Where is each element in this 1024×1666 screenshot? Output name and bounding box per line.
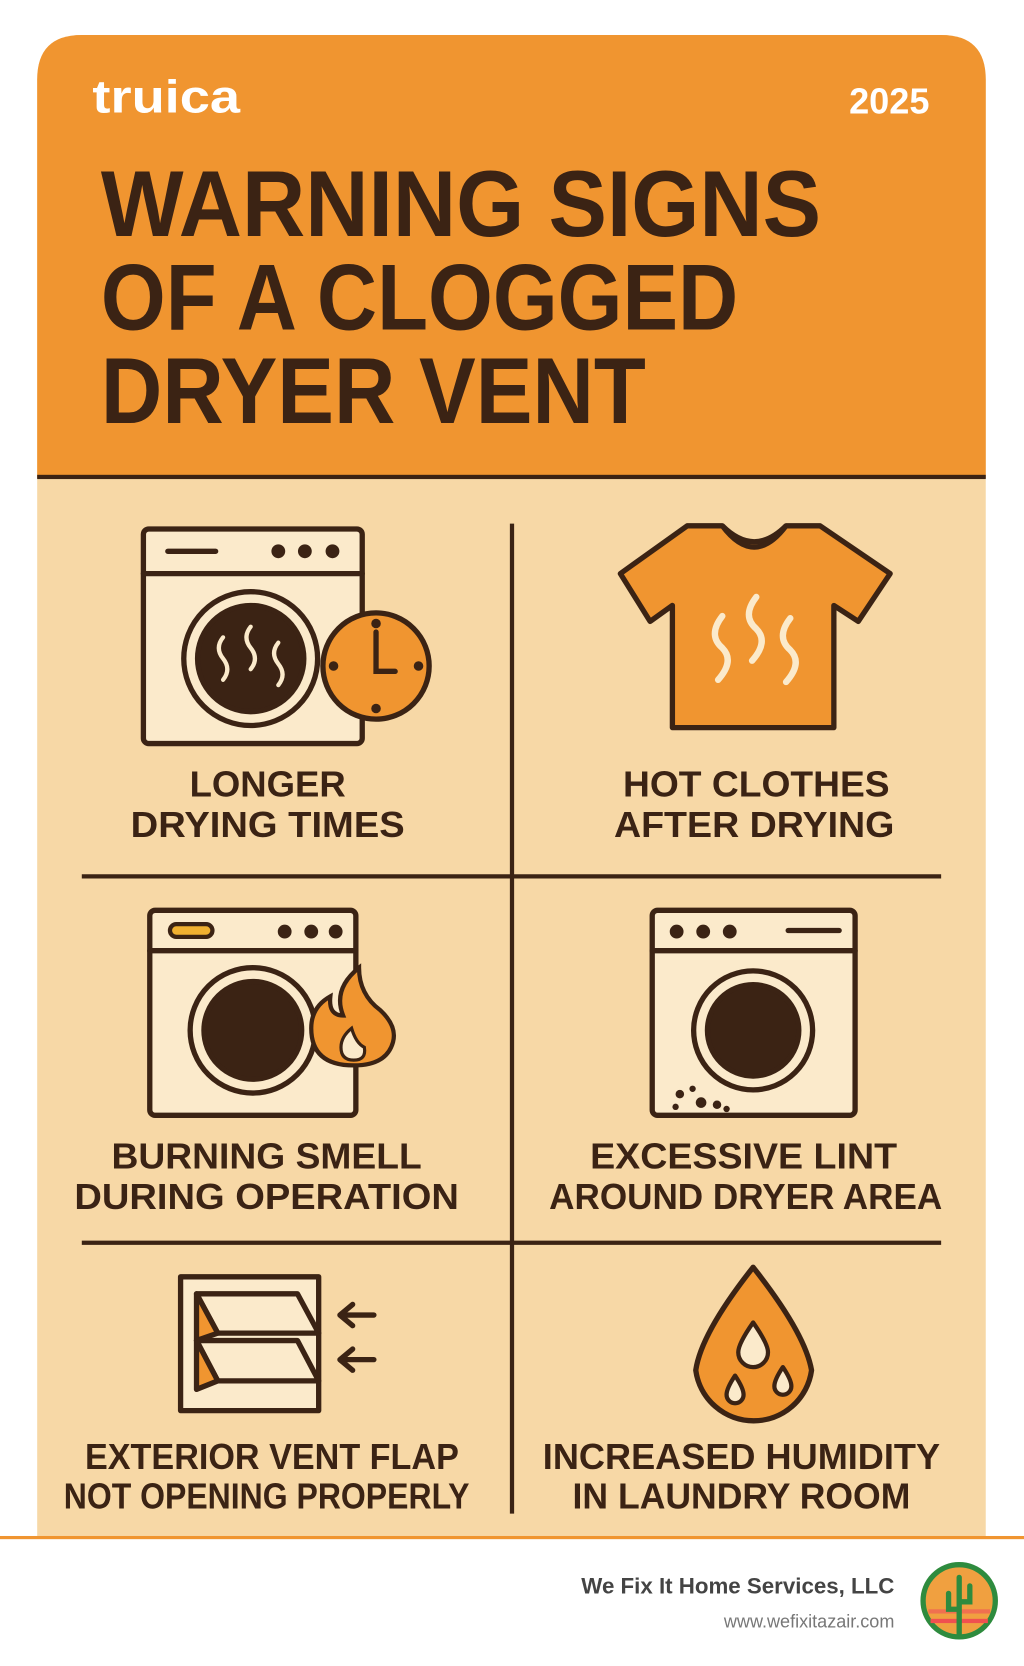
label: exterior vent flap: NOT OPENING PROPERLY bbox=[64, 1475, 470, 1516]
label: longer drying times bbox=[131, 764, 405, 845]
icon: vent flap with arrows bbox=[181, 1277, 374, 1411]
icon: dryer with flame bbox=[150, 910, 394, 1115]
logo: truica: truica bbox=[92, 71, 241, 123]
label: increased humidity: INCREASED HUMIDITY bbox=[543, 1436, 940, 1477]
label: exterior vent flap: EXTERIOR VENT FLAP bbox=[85, 1436, 459, 1477]
label: hot clothes bbox=[614, 764, 894, 845]
label: exterior vent flap bbox=[64, 1436, 470, 1516]
title: OF A CLOGGED bbox=[101, 244, 738, 349]
footer company text bbox=[581, 1573, 894, 1631]
label: longer drying times: DRYING TIMES bbox=[131, 804, 405, 845]
label: excessive lint: EXCESSIVE LINT bbox=[590, 1135, 897, 1176]
label: burning smell: DURING OPERATION bbox=[74, 1176, 459, 1217]
label: hot clothes: AFTER DRYING bbox=[614, 804, 894, 845]
year: 2025 bbox=[849, 81, 929, 122]
icon: dryer with clock bbox=[143, 529, 429, 744]
title: DRYER VENT bbox=[101, 338, 646, 443]
title: WARNING SIGNS bbox=[101, 151, 821, 256]
footer company text: We Fix It Home Services, LLC bbox=[581, 1573, 894, 1598]
header panel bbox=[37, 35, 986, 478]
label: hot clothes: HOT CLOTHES bbox=[623, 764, 890, 805]
label: increased humidity: IN LAUNDRY ROOM bbox=[573, 1475, 910, 1516]
label: excessive lint: AROUND DRYER AREA bbox=[549, 1176, 942, 1217]
label: excessive lint bbox=[549, 1135, 942, 1217]
footer company text: www.wefixitazair.com bbox=[723, 1611, 894, 1631]
icon: dryer with lint bbox=[652, 910, 855, 1115]
footer logo: cactus bbox=[923, 1565, 995, 1637]
label: burning smell: BURNING SMELL bbox=[112, 1135, 422, 1176]
label: increased humidity bbox=[543, 1436, 940, 1516]
label: longer drying times: LONGER bbox=[190, 764, 346, 805]
icon: water drop bbox=[696, 1267, 812, 1421]
label: burning smell bbox=[74, 1135, 459, 1217]
icon: hot shirt bbox=[620, 526, 890, 728]
title bbox=[101, 151, 821, 443]
